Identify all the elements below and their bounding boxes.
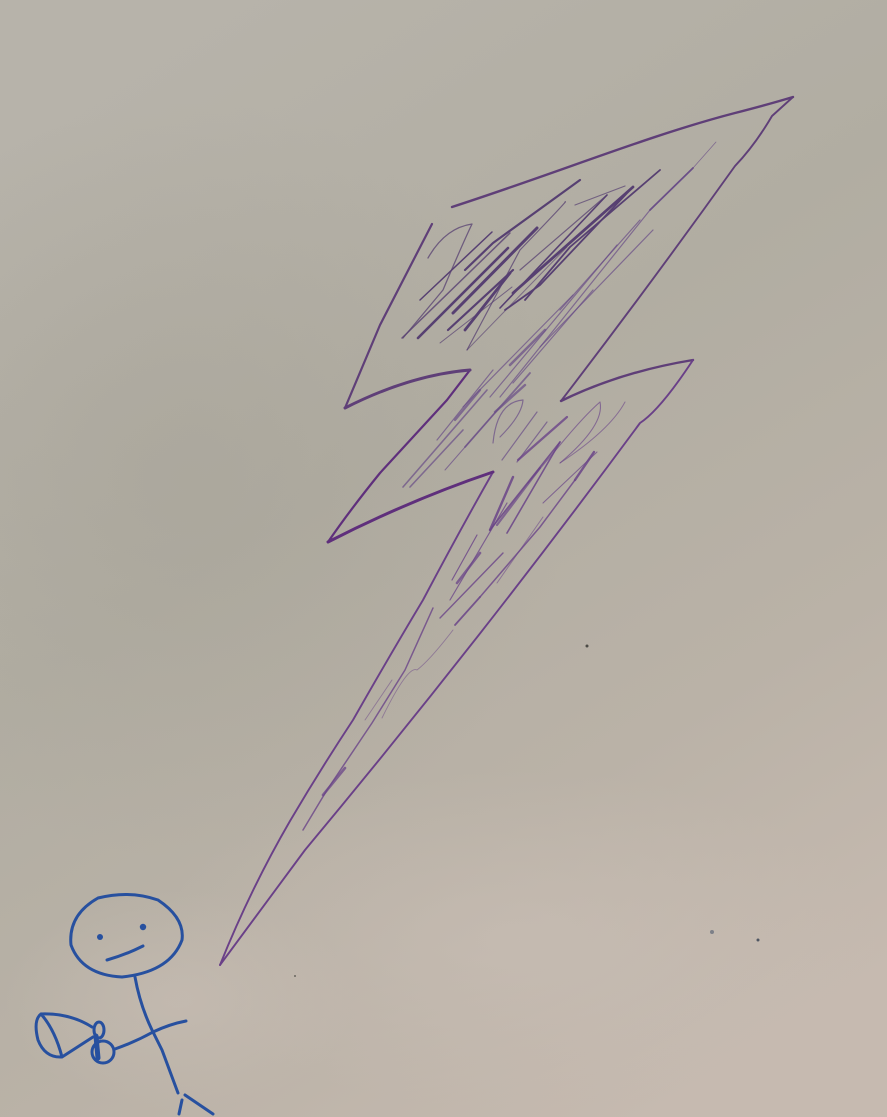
face xyxy=(97,924,146,960)
lightning bolt xyxy=(220,97,793,965)
hand xyxy=(92,1022,114,1063)
head xyxy=(71,894,182,977)
body xyxy=(135,977,178,1093)
megaphone xyxy=(36,1014,93,1057)
legs xyxy=(179,1095,213,1114)
arm xyxy=(115,1021,186,1049)
middle light scribble xyxy=(403,142,716,487)
upper dark scribble xyxy=(402,170,660,350)
stick figure xyxy=(36,894,213,1114)
bolt outline xyxy=(220,97,793,965)
lower scribble xyxy=(303,402,625,830)
